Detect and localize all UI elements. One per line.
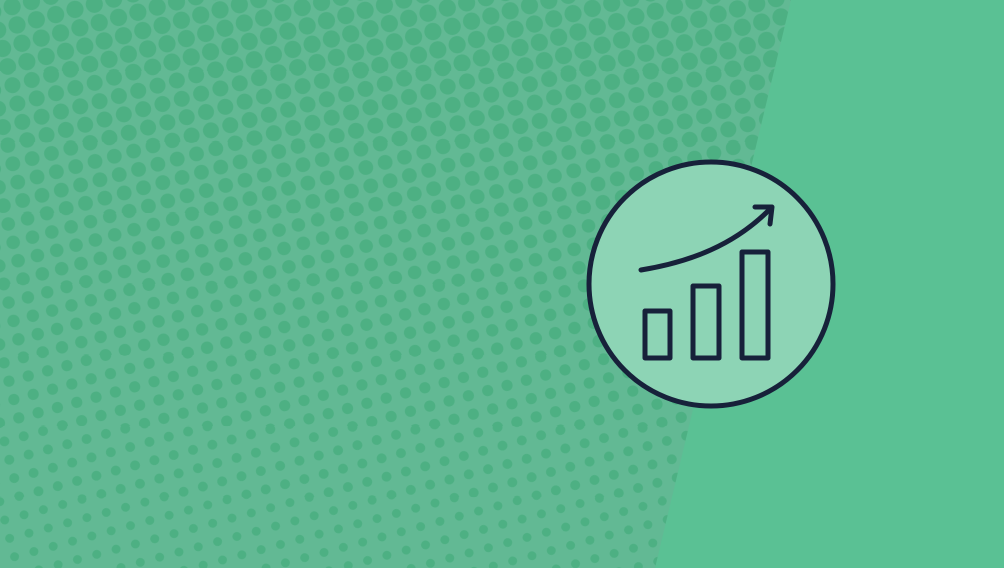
bar chart <box>645 252 768 358</box>
icon: growth chart in circle <box>589 162 833 406</box>
halftone dot background panel <box>0 0 800 568</box>
arrow: upward trend <box>641 207 772 270</box>
